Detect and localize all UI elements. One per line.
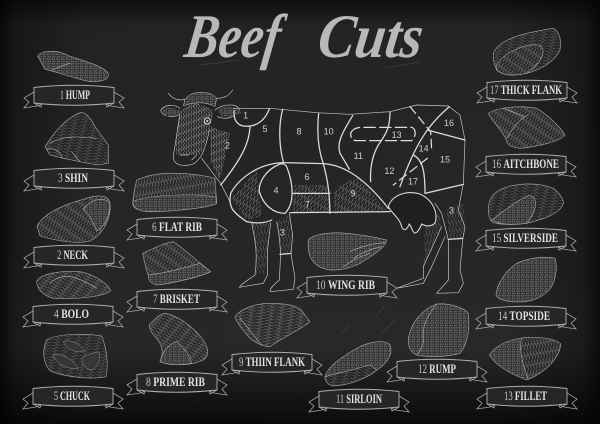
ribbon: 10 wing rib	[297, 275, 397, 298]
cut numbers: 13	[392, 130, 402, 140]
title: Cuts	[314, 2, 428, 71]
ribbon: 4 bolo	[23, 304, 123, 327]
ribbon: 17 thick flank: 17 THICK FLANK	[490, 82, 563, 97]
meat: rump	[408, 304, 469, 357]
cut numbers: 11	[354, 151, 363, 161]
ribbon: 14 topside	[476, 306, 576, 329]
cut numbers: 17	[408, 176, 418, 186]
ribbon: 1 hump	[24, 85, 124, 108]
meat: sirloin	[325, 342, 391, 386]
meat: thick flank	[493, 28, 561, 75]
title: Beef	[180, 2, 290, 71]
ribbon: 16 aitchbone: 16 AITCHBONE	[492, 156, 559, 171]
cut numbers: 7	[305, 199, 310, 209]
ribbon: 15 silverside: 15 SILVERSIDE	[492, 230, 558, 245]
meat: neck	[37, 196, 110, 242]
ribbon: 17 thick flank	[477, 80, 577, 103]
meat: topside	[496, 257, 556, 302]
ribbon: 5 chuck: 5 CHUCK	[54, 388, 91, 403]
cow outline	[161, 90, 465, 293]
cut numbers: 9	[350, 188, 355, 198]
meat: wing rib	[308, 233, 387, 270]
title	[180, 2, 428, 71]
cut numbers: 2	[225, 140, 230, 150]
cut numbers: 3	[280, 228, 285, 238]
cut numbers: 10	[324, 126, 334, 136]
meat: silverside	[488, 184, 563, 224]
meat: flat rib	[133, 173, 217, 212]
ribbon: 13 fillet	[477, 386, 577, 409]
ribbon: 13 fillet: 13 FILLET	[504, 388, 547, 403]
ribbon: 2 neck	[24, 245, 124, 268]
cut lines	[221, 107, 465, 254]
ribbon: 9 thiin flank	[222, 352, 322, 375]
ribbon: 11 sirloin	[309, 389, 409, 412]
meat: chuck	[44, 334, 107, 378]
ribbon: 2 neck: 2 NECK	[57, 247, 89, 262]
ribbon: 6 flat rib: 6 FLAT RIB	[152, 219, 202, 234]
ribbon: 11 sirloin: 11 SIRLOIN	[336, 391, 382, 406]
cut numbers: 5	[262, 124, 267, 134]
ribbon: 3 shin	[24, 168, 124, 191]
ribbon: 8 prime rib	[127, 372, 227, 395]
cut numbers: 15	[440, 154, 450, 164]
cut numbers	[225, 110, 454, 238]
ribbon: 10 wing rib: 10 WING RIB	[316, 277, 375, 292]
ribbon: 12 rump: 12 RUMP	[418, 361, 456, 376]
ribbon: 9 thiin flank: 9 THIIN FLANK	[239, 354, 306, 369]
cut numbers: 4	[273, 186, 278, 196]
meat: thin flank	[235, 303, 310, 347]
ribbon: 8 prime rib: 8 PRIME RIB	[146, 374, 205, 389]
ribbon: 4 bolo: 4 BOLO	[54, 306, 89, 321]
cut numbers: 12	[384, 166, 394, 176]
meat: brisket	[143, 242, 211, 285]
cut numbers: 3	[449, 206, 454, 216]
cut numbers: 8	[296, 126, 301, 136]
ribbon: 6 flat rib	[127, 217, 227, 240]
cut numbers: 14	[419, 144, 429, 154]
ribbon: 7 brisket	[127, 289, 227, 312]
meat: bolo	[37, 271, 111, 299]
ribbon: 14 topside: 14 TOPSIDE	[498, 308, 550, 323]
ribbon: 12 rump	[387, 359, 487, 382]
cut numbers: 16	[444, 118, 454, 128]
cow fur shading	[176, 102, 465, 273]
ribbon: 3 shin: 3 SHIN	[58, 170, 88, 185]
meat: aitchbone	[488, 107, 565, 148]
ribbon: 15 silverside	[476, 228, 576, 251]
udder	[388, 193, 436, 233]
meat: fillet	[489, 337, 561, 380]
meat: hump	[38, 51, 108, 82]
ribbon: 5 chuck	[23, 386, 123, 409]
cow diagram	[161, 90, 465, 293]
ribbon: 7 brisket: 7 BRISKET	[153, 291, 200, 306]
meat: shin	[45, 113, 108, 165]
ribbon: 1 hump: 1 HUMP	[60, 87, 90, 102]
cut numbers: 6	[304, 172, 309, 182]
meat: prime rib	[149, 313, 208, 365]
ribbon: 16 aitchbone	[476, 154, 576, 177]
cut numbers: 1	[243, 110, 248, 120]
